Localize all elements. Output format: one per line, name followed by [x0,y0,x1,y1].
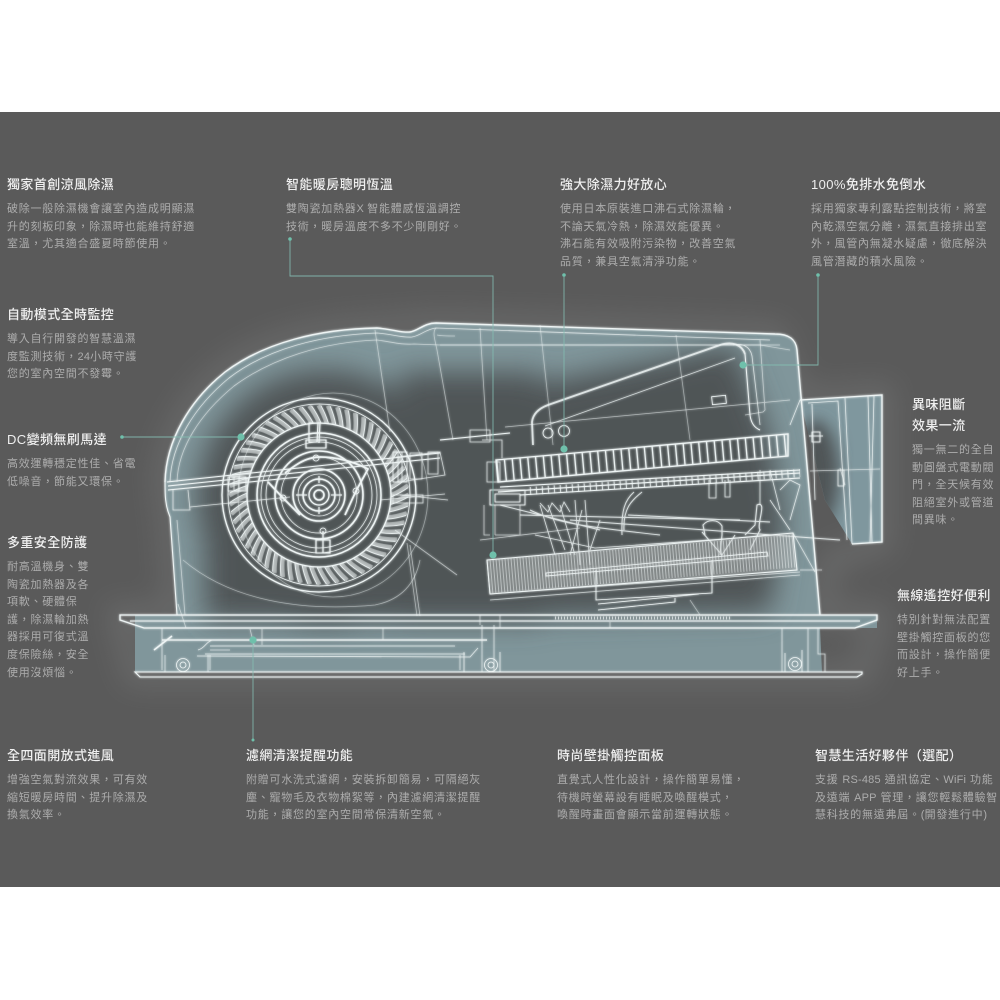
feature: strong dehumidify: 使用日本原裝進口沸石式除濕輪， [560,203,736,215]
feature: auto mode [7,307,137,380]
feature: four-side intake: 全四面開放式進風 [7,748,114,763]
feature: strong dehumidify [560,177,736,268]
feature: cool air dehumidify: 破除一般除濕機會讓室內造成明顯濕 [7,203,195,215]
feature: odor block: 阻絕室外或管道 [912,497,994,509]
feature: smart heating: 智能暖房聰明恆溫 [286,177,393,192]
feature: four-side intake: 縮短暖房時間、提升除濕及 [7,792,148,804]
feature: auto mode: 度監測技術，24小時守護 [7,351,137,363]
exploded wireframe diagram with background and leader lines [0,112,1000,887]
feature: filter reminder [246,748,481,821]
feature: safety: 多重安全防護 [7,535,87,550]
housing outline [165,323,820,616]
feature: four-side intake [7,748,148,821]
feature: no drainage: 外，風管內無凝水疑慮，徹底解決 [811,238,987,250]
feature: odor block: 動圓盤式電動閥 [912,462,994,474]
feature: DC motor: DC變頻無刷馬達 [7,432,107,447]
feature: smart life: 及遠端 APP 管理，讓您輕鬆體驗智 [815,792,998,804]
feature: filter reminder: 功能，讓您的室內空間常保清新空氣。 [246,809,446,821]
feature: no drainage: 風管潛藏的積水風險。 [811,256,928,268]
feature: safety: 器採用可復式溫 [7,631,89,643]
feature: smart life: 支援 RS-485 通訊協定、WiFi 功能 [815,774,993,786]
feature: no drainage: 內乾濕空氣分離，濕氣直接排出室 [811,221,987,233]
feature: filter reminder: 附贈可水洗式濾網，安裝拆卸簡易，可隔絕灰 [246,774,481,786]
feature: auto mode: 導入自行開發的智慧溫濕 [7,333,136,345]
feature: wall touch panel: 待機時螢幕設有睡眠及喚醒模式， [557,792,733,804]
main outlines [120,323,882,677]
feature: smart life [815,748,998,821]
feature: wireless remote: 特別針對無法配置 [897,614,991,626]
feature: safety: 使用沒煩惱。 [7,667,78,679]
feature: smart life: 智慧生活好夥伴（選配） [815,748,962,763]
screws [176,658,802,672]
feature: safety: 陶瓷加熱器及各 [7,579,89,591]
feature: smart heating [286,177,462,233]
heat exchanger fins [487,533,822,610]
feature: wall touch panel [557,748,745,821]
feature: safety: 項軟、硬體保 [7,596,78,608]
feature: wireless remote: 壁掛觸控面板的您 [897,632,991,644]
feature: wall touch panel: 時尚壁掛觸控面板 [557,748,664,763]
feature: smart life: 慧科技的無遠弗屆。(開發進行中) [815,809,987,821]
feature: filter reminder: 塵、寵物毛及衣物棉絮等，內建濾網清潔提醒 [246,792,481,804]
feature: DC motor [7,432,136,488]
callout dots [120,237,820,741]
feature: strong dehumidify: 品質，兼具空氣清淨功能。 [560,256,701,268]
feature: odor block: 門，全天候有效 [912,479,994,491]
feature: auto mode: 自動模式全時監控 [7,307,114,322]
feature: wireless remote: 而設計，操作簡便 [897,649,991,661]
leader lines [122,239,818,740]
feature: odor block: 異味阻斷 [912,397,966,412]
air duct shape [505,340,790,445]
feature: safety: 護，除濕輪加熱 [7,614,89,626]
feature: strong dehumidify: 強大除濕力好放心 [560,177,667,192]
feature: odor block: 效果一流 [912,418,966,433]
soft glow around machine [120,323,882,675]
lower plates [120,604,877,677]
feature: wireless remote: 無線遙控好便利 [897,588,991,603]
feature: odor block: 間異味。 [912,514,959,526]
feature: cool air dehumidify: 升的刻板印象，除濕時也能維持舒適 [7,221,195,233]
feature: smart heating: 雙陶瓷加熱器X 智能體感恆溫調控 [286,203,461,215]
desiccant rotor wheel [470,430,800,540]
feature: smart heating: 技術，暖房溫度不多不少剛剛好。 [286,221,462,233]
feature: odor block [912,397,994,526]
feature: wireless remote: 好上手。 [897,667,944,679]
feature: odor block: 獨一無二的全自 [912,444,994,456]
feature: no drainage [811,177,987,268]
feature: safety: 度保險絲，安全 [7,649,89,661]
feature: four-side intake: 換氣效率。 [7,809,66,821]
mid linkage and ribs [500,480,840,565]
feature: safety: 耐高溫機身、雙 [7,561,89,573]
feature: DC motor: 低噪音，節能又環保。 [7,476,124,488]
feature: wireless remote [897,588,991,679]
centrifugal fan [222,393,428,597]
feature: safety [7,535,89,679]
horizontal support bar through fan [167,433,510,510]
feature: cool air dehumidify [7,177,195,250]
feature: auto mode: 您的室內空間不發霉。 [7,368,124,380]
feature: filter reminder: 濾網清潔提醒功能 [246,748,353,763]
feature: cool air dehumidify: 獨家首創涼風除濕 [7,177,114,192]
feature: no drainage: 採用獨家專利露點控制技術，將室 [811,203,987,215]
feature: strong dehumidify: 不論天氣冷熱，除濕效能優異。 [560,221,724,233]
wall control panel [790,395,882,544]
feature: DC motor: 高效運轉穩定性佳、省電 [7,458,136,470]
feature: four-side intake: 增強空氣對流效果，可有效 [7,774,148,786]
machine interior tint [135,324,877,672]
feature: cool air dehumidify: 室溫，尤其適合盛夏時節使用。 [7,238,172,250]
feature: wall touch panel: 喚醒時畫面會顯示當前運轉狀態。 [557,809,733,821]
feature: strong dehumidify: 沸石能有效吸附污染物，改善空氣 [560,238,736,250]
feature: wall touch panel: 直覺式人性化設計，操作簡單易懂， [557,774,745,786]
feature: no drainage: 100%免排水免倒水 [811,177,926,192]
